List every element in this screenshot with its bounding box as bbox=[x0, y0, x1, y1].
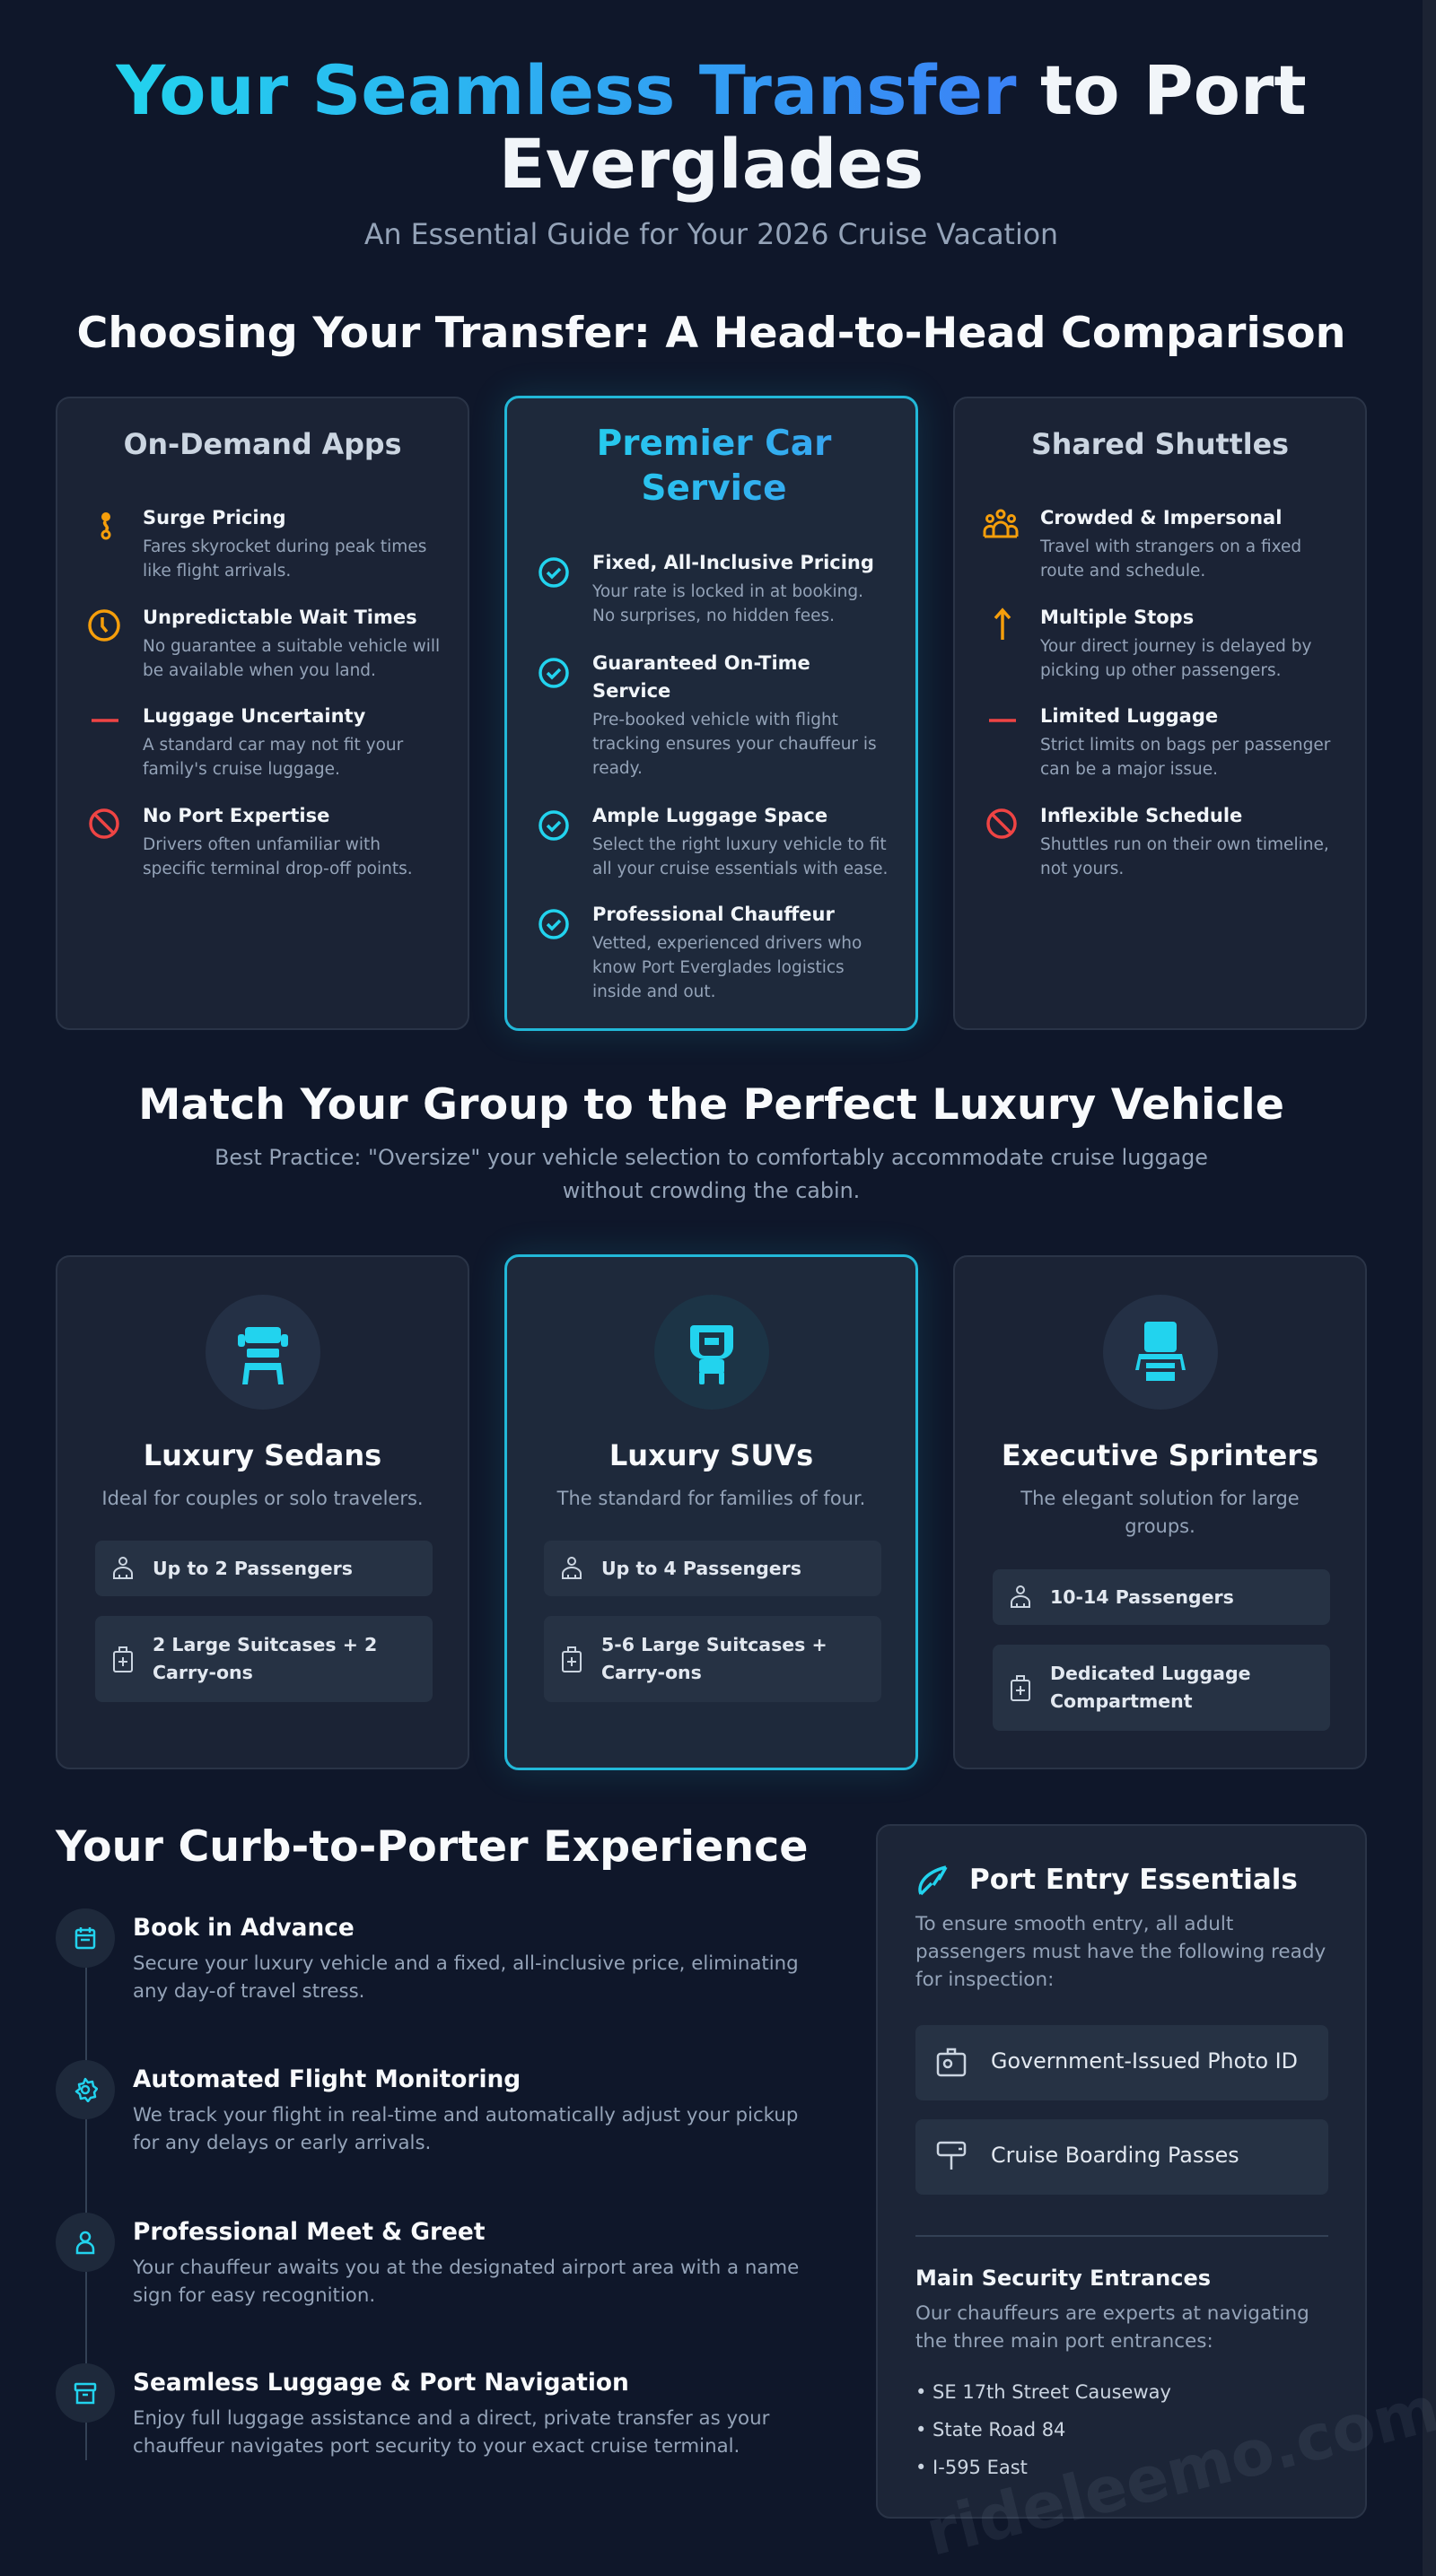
panel: premier car service: Vetted, experienced drivers who know Port Everglades logistics inside and out. bbox=[592, 934, 862, 1001]
panel: premier car service bbox=[504, 396, 918, 1031]
item: multiple stops bbox=[994, 607, 1311, 680]
vehicle desc: The elegant solution for large groups. bbox=[1020, 1488, 1300, 1537]
step: meet & greet: Professional Meet & Greet bbox=[133, 2218, 485, 2246]
vehicle title: Luxury SUVs bbox=[609, 1438, 813, 1472]
feature: passengers bbox=[993, 1569, 1330, 1625]
panel: luxury SUVs bbox=[504, 1254, 918, 1770]
section heading: comparison: Choosing Your Transfer: A Head-to-Head Comparison bbox=[76, 309, 1346, 358]
item: luggage bbox=[92, 705, 404, 779]
panel: shared shuttles: Crowded & Impersonal bbox=[1040, 507, 1282, 528]
subheading: security entrances: Main Security Entrances bbox=[915, 2266, 1211, 2291]
entrances list: • SE 17th Street Causeway bbox=[915, 2381, 1171, 2403]
feature: luggage bbox=[993, 1645, 1330, 1731]
feature: passengers: Up to 2 Passengers bbox=[153, 1558, 353, 1579]
icon: SUV bbox=[653, 1295, 768, 1410]
watermark: rideleemo.com bbox=[919, 2372, 1436, 2571]
icon: person bbox=[56, 2213, 115, 2272]
item: on-time bbox=[538, 652, 877, 778]
requirement: boarding passes: Cruise Boarding Passes bbox=[991, 2143, 1239, 2168]
item: luggage space bbox=[538, 805, 888, 878]
title bbox=[116, 50, 1307, 204]
section heading: vehicles: Match Your Group to the Perfect Luxury Vehicle bbox=[138, 1080, 1284, 1130]
step: luggage & navigation: Seamless Luggage & Port Navigation bbox=[133, 2369, 629, 2397]
step: flight monitoring: Automated Flight Monitoring bbox=[133, 2065, 521, 2093]
panel: premier car service: Pre-booked vehicle with flight tracking ensures your chauffeur is ready. bbox=[592, 711, 877, 778]
card title: Shared Shuttles bbox=[1031, 429, 1289, 461]
icon: sedan bbox=[205, 1295, 320, 1410]
step: luggage & navigation: Enjoy full luggage assistance and a direct, private transfer as your chauffeur navigates port security to your exact cruise terminal. bbox=[133, 2407, 769, 2458]
requirement: boarding passes bbox=[915, 2119, 1328, 2195]
title: Everglades bbox=[499, 124, 924, 204]
panel: on-demand apps: Surge Pricing bbox=[143, 507, 286, 528]
panel: on-demand apps: Unpredictable Wait Times bbox=[143, 607, 417, 628]
vehicles subtitle: Best Practice: "Oversize" your vehicle selection to comfortably accommodate cruise luggage bbox=[215, 1145, 1208, 1170]
panel: shared shuttles bbox=[953, 397, 1367, 1030]
vehicle title: Luxury Sedans bbox=[144, 1438, 381, 1472]
panel: shared shuttles: Your direct journey is delayed by picking up other passengers. bbox=[1040, 637, 1311, 680]
feature: luggage bbox=[95, 1616, 433, 1702]
card title: Premier Car bbox=[597, 424, 831, 464]
panel: premier car service: No surprises, no hidden fees. bbox=[592, 607, 835, 625]
item: fixed pricing bbox=[538, 552, 874, 625]
panel: executive sprinters bbox=[953, 1255, 1367, 1769]
panel: on-demand apps: A standard car may not fit your family's cruise luggage. bbox=[143, 736, 403, 779]
feature: luggage: 2 Large Suitcases + 2 Carry-ons bbox=[153, 1634, 377, 1683]
entrances desc: Our chauffeurs are experts at navigating the three main port entrances: bbox=[915, 2302, 1309, 2353]
feature: passengers bbox=[95, 1541, 433, 1596]
panel: on-demand apps: Drivers often unfamiliar with specific terminal drop-off points. bbox=[143, 835, 413, 878]
panel: premier car service: Ample Luggage Space bbox=[592, 805, 827, 826]
item: surge pricing bbox=[101, 507, 426, 581]
item: inflexible bbox=[986, 805, 1329, 878]
title: Your Seamless Transfer to Port bbox=[116, 50, 1307, 130]
panel: on-demand apps: No Port Expertise bbox=[143, 805, 329, 826]
step: flight monitoring bbox=[56, 2060, 798, 2154]
panel: premier car service: Your rate is locked in at booking. bbox=[592, 582, 863, 601]
panel: on-demand apps bbox=[56, 397, 469, 1030]
item: limited luggage bbox=[989, 705, 1330, 779]
item: wait times bbox=[88, 607, 440, 680]
feature: passengers bbox=[544, 1541, 881, 1596]
panel: shared shuttles: Multiple Stops bbox=[1040, 607, 1194, 628]
panel: luxury sedans bbox=[56, 1255, 469, 1769]
step: luggage & navigation bbox=[56, 2363, 770, 2458]
section heading: experience: Your Curb-to-Porter Experience bbox=[56, 1822, 808, 1872]
card title: Service bbox=[641, 468, 787, 509]
panel: on-demand apps: No guarantee a suitable vehicle will be available when you land. bbox=[143, 637, 440, 680]
panel: premier car service: Fixed, All-Inclusive Pricing bbox=[592, 552, 874, 573]
feature: passengers: 10-14 Passengers bbox=[1050, 1586, 1234, 1608]
step: book in advance: Secure your luxury vehicle and a fixed, all-inclusive price, eliminating any day-of travel stress. bbox=[133, 1952, 799, 2003]
icon: archive bbox=[56, 2363, 115, 2423]
panel: shared shuttles: Strict limits on bags per passenger can be a major issue. bbox=[1040, 736, 1330, 779]
panel: shared shuttles: Limited Luggage bbox=[1040, 705, 1218, 727]
panel: shared shuttles: Inflexible Schedule bbox=[1040, 805, 1242, 826]
panel: port entry essentials bbox=[876, 1824, 1367, 2519]
entrances list: • I-595 East bbox=[915, 2457, 1028, 2478]
step: flight monitoring: We track your flight in real-time and automatically adjust your pickup for any delays or early arrivals. bbox=[133, 2104, 798, 2154]
requirement: photo ID bbox=[915, 2025, 1328, 2100]
feature: luggage: Dedicated Luggage Compartment bbox=[1050, 1663, 1251, 1712]
card title: On-Demand Apps bbox=[124, 429, 401, 461]
panel: premier car service: Select the right luxury vehicle to fit all your cruise essentials with ease. bbox=[592, 835, 888, 878]
subtitle: An Essential Guide for Your 2026 Cruise Vacation bbox=[364, 219, 1058, 251]
requirement: photo ID: Government-Issued Photo ID bbox=[991, 2048, 1298, 2074]
icon: ticket/plane bbox=[918, 1865, 948, 1895]
feature: luggage: 5-6 Large Suitcases + Carry-ons bbox=[601, 1634, 827, 1683]
feature: luggage bbox=[544, 1616, 881, 1702]
panel: on-demand apps: Fares skyrocket during peak times like flight arrivals. bbox=[143, 537, 426, 581]
item: chauffeur bbox=[538, 904, 862, 1001]
feature: passengers: Up to 4 Passengers bbox=[601, 1558, 801, 1579]
vehicle desc: The standard for families of four. bbox=[557, 1488, 865, 1509]
panel: premier car service: Guaranteed On-Time bbox=[592, 652, 810, 674]
step: meet & greet bbox=[56, 2213, 799, 2307]
icon: calendar bbox=[56, 1908, 115, 1968]
vehicles subtitle bbox=[215, 1145, 1208, 1203]
step: book in advance: Book in Advance bbox=[133, 1914, 355, 1942]
panel: shared shuttles: Shuttles run on their own timeline, not yours. bbox=[1040, 835, 1329, 878]
item: port expertise bbox=[89, 805, 413, 878]
panel: shared shuttles: Travel with strangers on a fixed route and schedule. bbox=[1040, 537, 1301, 581]
panel desc: To ensure smooth entry, all adult passengers must have the following ready for inspection: bbox=[915, 1913, 1326, 1991]
panel: premier car service: Professional Chauffeur bbox=[592, 904, 835, 925]
entrances list: • State Road 84 bbox=[915, 2419, 1065, 2441]
icon: sprinter bbox=[1102, 1295, 1217, 1410]
panel title: Port Entry Essentials bbox=[969, 1864, 1298, 1896]
item: crowded bbox=[984, 507, 1301, 581]
step: book in advance bbox=[56, 1908, 799, 2003]
vehicle desc: Ideal for couples or solo travelers. bbox=[101, 1488, 424, 1509]
entrances list bbox=[915, 2381, 1171, 2478]
panel: on-demand apps: Luggage Uncertainty bbox=[143, 705, 365, 727]
panel: premier car service: Service bbox=[592, 680, 670, 702]
vehicle title: Executive Sprinters bbox=[1002, 1438, 1318, 1472]
icon: gear bbox=[56, 2060, 115, 2119]
vehicles subtitle: without crowding the cabin. bbox=[563, 1178, 860, 1203]
card title bbox=[543, 422, 885, 511]
step: meet & greet: Your chauffeur awaits you at the designated airport area with a name sign for easy recognition. bbox=[133, 2257, 799, 2307]
